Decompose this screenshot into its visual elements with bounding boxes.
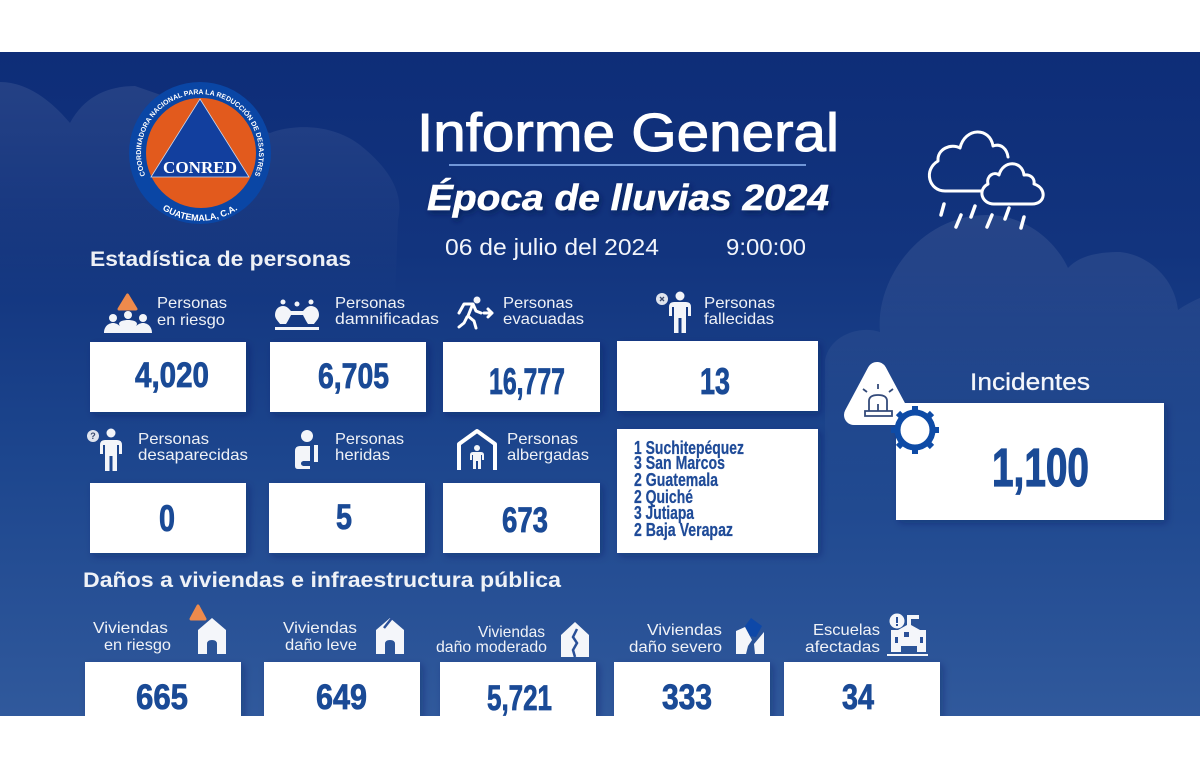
panel: personas en riesgo: Personas [157, 295, 227, 312]
icon: injured person [295, 430, 318, 469]
date and time: 06 de julio del 2024 [445, 234, 659, 260]
panel: personas damnificadas [270, 295, 439, 412]
panel: lista de departamentos: 3 San Marcos [634, 453, 725, 473]
panel: personas fallecidas [617, 292, 818, 411]
panel: personas desaparecidas: Personas [138, 431, 209, 448]
panel: personas evacuadas: evacuadas [503, 311, 584, 328]
icon: shelter with person [459, 431, 495, 470]
panel: personas damnificadas: Personas [335, 295, 405, 312]
icon: house with warning [191, 606, 226, 654]
panel: lista de departamentos: 1 Suchitepéquez [634, 438, 744, 458]
panel: viviendas daño severo: Viviendas [647, 622, 722, 639]
panel: viviendas en riesgo: Viviendas [93, 620, 168, 637]
icon: gear [891, 406, 939, 454]
panel: personas heridas: Personas [335, 431, 404, 448]
panel: viviendas daño leve: daño leve [285, 637, 357, 654]
panel: personas en riesgo: en riesgo [157, 312, 225, 329]
panel: viviendas daño leve: 649 [316, 678, 367, 717]
icon: person with question mark [87, 428, 122, 471]
panel: viviendas en riesgo [85, 606, 241, 717]
panel: personas desaparecidas [87, 428, 248, 553]
panel: personas fallecidas: 13 [700, 361, 730, 402]
icon: house with crack [561, 622, 589, 657]
panel: viviendas daño severo: daño severo [629, 639, 722, 656]
panel: viviendas daño leve: Viviendas [283, 620, 357, 637]
panel: personas en riesgo [90, 295, 246, 412]
panel: personas evacuadas [443, 295, 600, 412]
panel: personas damnificadas: damnificadas [335, 311, 439, 328]
panel: lista de departamentos: 2 Guatemala [634, 470, 719, 490]
heading: estadística de personas: Estadística de personas [90, 248, 351, 271]
icon: warning and people [104, 295, 152, 333]
panel: escuelas afectadas [784, 614, 940, 717]
panel: escuelas afectadas: afectadas [805, 639, 880, 656]
panel: personas evacuadas: Personas [503, 295, 573, 312]
panel: personas desaparecidas: desaparecidas [138, 447, 248, 464]
panel: personas en riesgo: 4,020 [135, 356, 209, 395]
panel: lista de departamentos: 2 Baja Verapaz [634, 520, 733, 540]
title [417, 103, 839, 218]
date and time [445, 234, 806, 260]
panel: escuelas afectadas: Escuelas [813, 622, 880, 639]
bottom white margin [0, 716, 1200, 768]
panel: incidentes: Incidentes [970, 369, 1090, 396]
panel: viviendas daño moderado: daño moderado [436, 639, 547, 656]
panel: personas desaparecidas: 0 [159, 498, 175, 539]
logo: CONRED: GUATEMALA, C.A. [163, 205, 238, 221]
panel: personas fallecidas: Personas [704, 295, 775, 312]
icon: running person with arrow [459, 296, 492, 328]
panel: incidentes [854, 369, 1164, 520]
panel: lista de departamentos: 2 Quiché [634, 487, 693, 507]
title: Informe General [417, 103, 839, 163]
title: Época de lluvias 2024 [427, 177, 829, 218]
panel: personas albergadas: albergadas [507, 447, 589, 464]
logo: CONRED [129, 82, 271, 224]
icon: people group [275, 300, 319, 330]
panel: personas albergadas [443, 431, 600, 553]
panel: viviendas daño leve [264, 618, 420, 717]
logo: CONRED: CONRED [163, 158, 237, 177]
panel: personas albergadas: Personas [507, 431, 578, 448]
icon: rain clouds [929, 132, 1043, 228]
panel: personas fallecidas: fallecidas [704, 311, 774, 328]
panel: viviendas daño moderado: 5,721 [487, 679, 552, 718]
panel: personas evacuadas: 16,777 [489, 361, 565, 402]
panel: lista de departamentos [617, 429, 818, 553]
panel: personas albergadas: 673 [502, 501, 548, 540]
icon: house with light damage [376, 618, 404, 654]
icon: person with question mark: ? [90, 431, 96, 441]
icon: school [887, 614, 928, 656]
panel: personas damnificadas: 6,705 [318, 357, 389, 396]
panel: viviendas daño severo: 333 [662, 678, 712, 717]
panel: viviendas en riesgo: 665 [136, 678, 188, 717]
heading: daños a viviendas: Daños a viviendas e infraestructura pública [83, 569, 561, 592]
panel: personas heridas: 5 [336, 498, 352, 537]
icon: house with severe damage [736, 618, 764, 654]
panel: viviendas daño moderado: Viviendas [478, 624, 545, 641]
panel: incidentes: 1,100 [992, 438, 1089, 498]
date and time: 9:00:00 [726, 234, 806, 260]
panel: personas heridas [269, 430, 425, 553]
logo: CONRED: COORDINADORA NACIONAL PARA LA REDUCCIÓN DE DESASTRES [136, 89, 264, 176]
icon: alarm triangle [854, 372, 900, 416]
panel: viviendas daño severo [614, 618, 770, 717]
panel: lista de departamentos: 3 Jutiapa [634, 503, 695, 523]
panel: viviendas daño moderado [436, 622, 596, 718]
panel: viviendas en riesgo: en riesgo [104, 637, 171, 654]
panel: personas heridas: heridas [335, 447, 390, 464]
panel: escuelas afectadas: 34 [842, 678, 874, 717]
icon: person with x [656, 292, 691, 333]
